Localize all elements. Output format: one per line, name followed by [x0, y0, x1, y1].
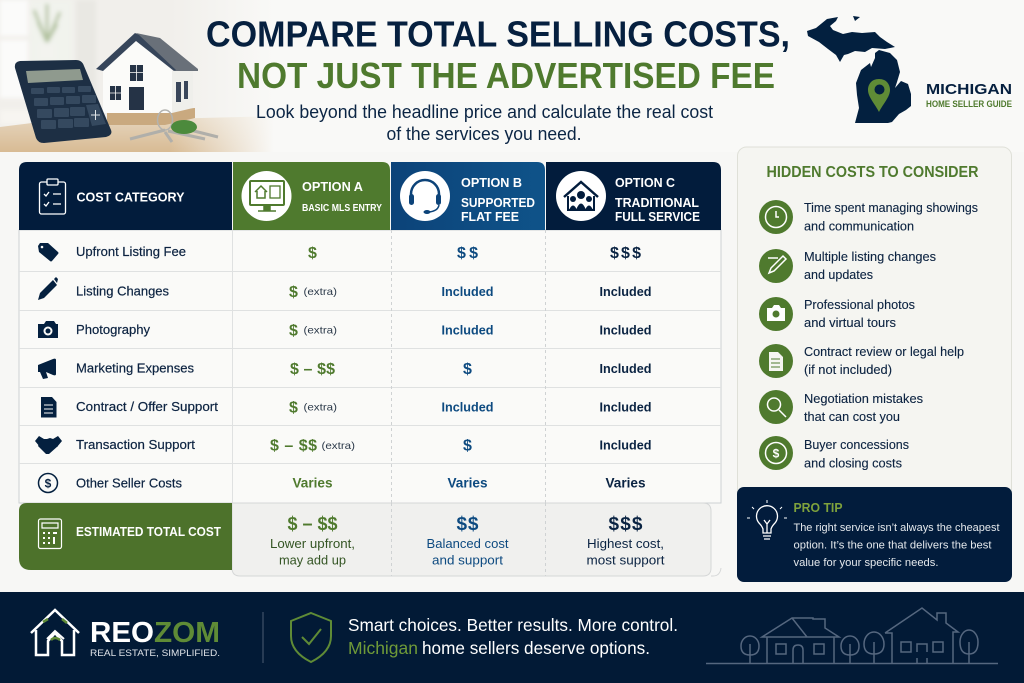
logo: REOZOM: REAL ESTATE, SIMPLIFIED.	[90, 648, 220, 658]
icon: calculator	[38, 519, 62, 548]
comparison table	[19, 162, 721, 576]
callout: pro tip: option. It’s the one that delivers the best	[794, 540, 992, 552]
item: photos	[759, 297, 915, 331]
row: listing changes: $	[289, 284, 298, 301]
keys	[130, 110, 218, 142]
item: photos: Professional photos	[804, 297, 915, 312]
row: estimated total cost: Highest cost,	[587, 536, 664, 551]
row: marketing expenses	[38, 359, 652, 379]
callout: pro tip: The right service isn’t always the cheapest	[794, 522, 1000, 534]
logo: REOZOM: REO	[90, 617, 154, 649]
icon: light bulb	[747, 500, 787, 539]
item: listing changes: and updates	[804, 267, 873, 282]
header: option B: OPTION B	[461, 175, 522, 190]
row: upfront listing fee: $$$	[610, 245, 641, 262]
Michigan guide label	[926, 81, 1012, 110]
row: other seller costs: Other Seller Costs	[76, 476, 182, 490]
model house	[96, 33, 198, 125]
header: option A: OPTION A	[302, 179, 364, 194]
item: concessions: Buyer concessions	[804, 437, 909, 452]
tagline: home sellers deserve options.	[422, 638, 650, 658]
row: photography: (extra)	[304, 324, 337, 336]
table body	[19, 230, 721, 503]
row: upfront listing fee: $$	[457, 245, 478, 262]
row: photography: Photography	[76, 322, 150, 337]
item: concessions	[759, 436, 909, 470]
header: option B	[391, 162, 545, 230]
row: transaction support: $ – $$	[270, 438, 317, 454]
icon: pencil	[38, 277, 58, 300]
item: contract: (if not included)	[804, 362, 892, 377]
icon: dollar circle	[38, 474, 58, 492]
row: estimated total cost	[19, 503, 721, 576]
row: marketing expenses: Included	[600, 361, 652, 376]
icon: house with family	[556, 171, 606, 221]
tagline: Smart choices. Better results. More control.	[348, 615, 678, 635]
item: concessions: $	[773, 446, 780, 460]
item: time: Time spent managing showings	[804, 200, 978, 215]
icon: price tag	[38, 243, 58, 262]
row: estimated total cost: may add up	[279, 552, 346, 568]
row: transaction support: Included	[600, 438, 652, 452]
row: contract / offer support: Included	[442, 400, 494, 414]
item: concessions: and closing costs	[804, 456, 902, 470]
subtitle	[256, 102, 713, 144]
row: photography	[38, 321, 652, 340]
icon: monitor with house	[242, 171, 292, 221]
icon: camera	[38, 321, 58, 338]
subtitle: of the services you need.	[386, 124, 582, 144]
item: photos: and virtual tours	[804, 315, 896, 330]
header: option C	[546, 162, 721, 230]
title: COMPARE TOTAL SELLING COSTS,	[206, 14, 790, 54]
item: time	[759, 200, 978, 234]
callout: pro tip: PRO TIP	[794, 500, 843, 515]
row: transaction support: Transaction Support	[76, 437, 195, 452]
icon: document	[41, 397, 56, 418]
icon: dollar circle: $	[45, 476, 52, 490]
tagline	[348, 615, 678, 658]
row: marketing expenses: $ – $$	[290, 361, 335, 378]
header: option C: TRADITIONAL	[615, 195, 699, 210]
row: listing changes: Listing Changes	[76, 284, 169, 298]
title: NOT JUST THE ADVERTISED FEE	[237, 55, 775, 96]
row: contract / offer support: Included	[600, 400, 652, 414]
header photo: calculator, model house and keys	[0, 0, 300, 152]
header: option B: FLAT FEE	[461, 209, 519, 224]
row: transaction support: (extra)	[322, 440, 355, 452]
calculator	[15, 60, 111, 143]
row: other seller costs	[38, 474, 646, 492]
row: photography: Included	[442, 322, 494, 338]
item: time: and communication	[804, 218, 914, 234]
icon: shield check	[291, 613, 331, 662]
row: listing changes: Included	[442, 284, 494, 299]
divider	[262, 612, 264, 663]
row: estimated total cost: $ – $$	[288, 514, 338, 535]
map pin	[868, 79, 890, 112]
subtitle: Look beyond the headline price and calculate the real cost	[256, 102, 713, 122]
row: estimated total cost: most support	[586, 552, 665, 568]
icon: clipboard checklist	[40, 179, 66, 214]
row: estimated total cost: and support	[432, 552, 503, 568]
row: other seller costs: Varies	[606, 476, 646, 490]
panel: hidden costs	[738, 147, 1012, 507]
row: estimated total cost: Balanced cost	[426, 536, 509, 551]
item: negotiation	[759, 390, 923, 424]
item: listing changes	[759, 249, 936, 283]
callout: pro tip: value for your specific needs.	[794, 557, 938, 569]
row: marketing expenses: $	[463, 361, 472, 378]
heading: HIDDEN COSTS TO CONSIDER	[766, 164, 978, 181]
item: listing changes: Multiple listing changes	[804, 249, 936, 264]
header: option A	[233, 162, 390, 230]
row: other seller costs: Varies	[292, 476, 332, 490]
header: cost category: COST CATEGORY	[76, 190, 185, 204]
header: option C: FULL SERVICE	[615, 209, 700, 224]
row: contract / offer support: $	[289, 400, 298, 416]
tagline: Michigan	[348, 638, 418, 658]
item: contract	[759, 344, 964, 378]
row: transaction support	[35, 436, 652, 454]
header: option B: SUPPORTED	[461, 195, 535, 210]
footer band	[0, 592, 1024, 683]
header: option A: BASIC MLS ENTRY	[302, 202, 382, 214]
row: contract / offer support: (extra)	[304, 402, 337, 414]
row: photography: Included	[600, 322, 652, 338]
logo: REOZOM: ZOM	[154, 617, 220, 649]
header: option C: OPTION C	[615, 175, 676, 190]
row: estimated total cost: $$$	[608, 514, 643, 535]
item: contract: Contract review or legal help	[804, 344, 964, 359]
icon: megaphone	[38, 359, 56, 379]
row: listing changes: (extra)	[304, 286, 337, 298]
item: negotiation: that can cost you	[804, 409, 900, 424]
logo: REOZOM	[31, 610, 220, 658]
callout: pro tip	[737, 487, 1012, 582]
illustration: neighborhood outline	[706, 608, 998, 664]
row: listing changes	[38, 277, 652, 301]
row: photography: $	[289, 322, 298, 340]
row: upfront listing fee: $	[308, 245, 317, 262]
row: marketing expenses: Marketing Expenses	[76, 360, 194, 376]
Michigan guide label: MICHIGAN	[926, 81, 1012, 98]
row: contract / offer support	[41, 397, 652, 418]
row: estimated total cost: $$	[456, 514, 479, 535]
row: upfront listing fee: Upfront Listing Fee	[76, 244, 186, 259]
header: cost category	[19, 162, 232, 230]
row: other seller costs: Varies	[448, 476, 488, 490]
icon: headset	[400, 171, 450, 221]
row: transaction support: $	[463, 438, 472, 454]
row: estimated total cost: ESTIMATED TOTAL COST	[76, 525, 221, 539]
icon: handshake	[35, 436, 62, 454]
row: listing changes: Included	[600, 284, 652, 299]
row: estimated total cost: Lower upfront,	[270, 536, 355, 551]
Michigan map with pin	[807, 16, 911, 123]
row: upfront listing fee	[38, 243, 641, 262]
title	[206, 14, 790, 96]
row: contract / offer support: Contract / Offer Support	[76, 399, 218, 414]
item: negotiation: Negotiation mistakes	[804, 391, 923, 406]
